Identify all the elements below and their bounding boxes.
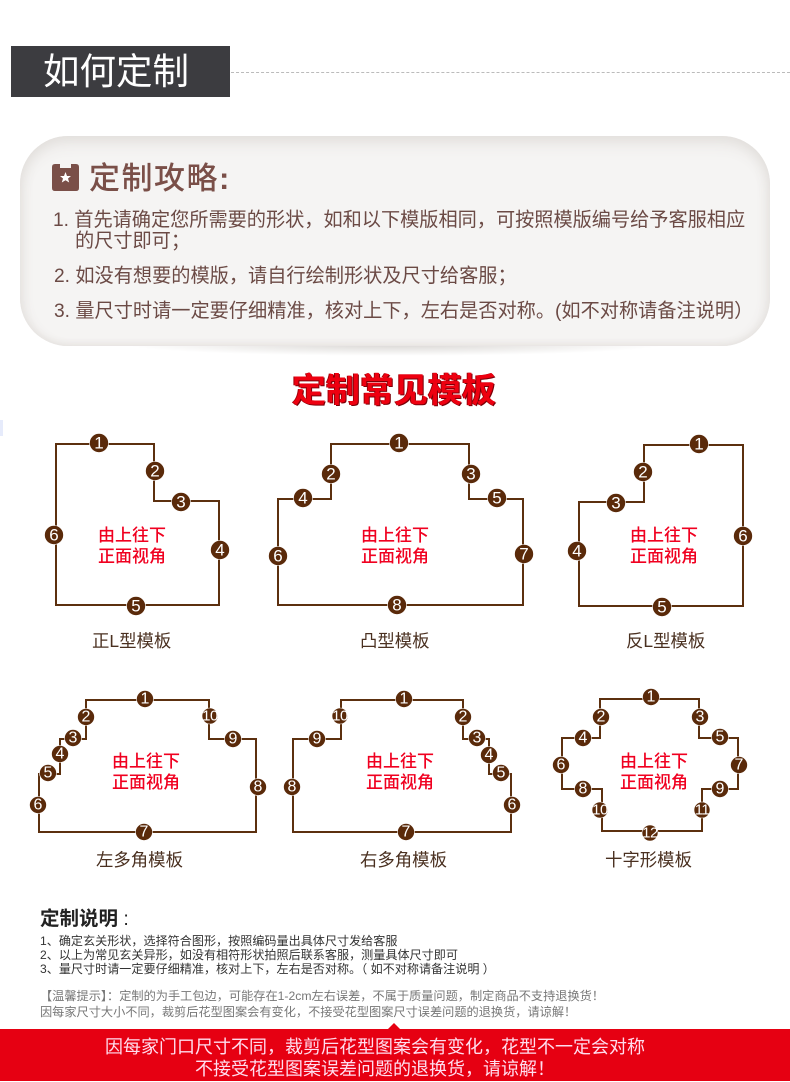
template: convex: 正面视角 [361, 547, 429, 566]
template: reverse L: 6 [738, 526, 748, 546]
template: positive L: 2 [150, 462, 160, 480]
template: right multi-corner: 右多角模板 [360, 850, 447, 870]
template: cross: 3 [696, 708, 705, 726]
icon: star badge [52, 164, 79, 191]
template: left multi-corner: 8 [254, 778, 263, 796]
template: cross: 6 [557, 756, 566, 774]
step 2: 2. 如没有想要的模版，请自行绘制形状及尺寸给客服； [54, 266, 517, 287]
red notice banner [0, 1029, 790, 1081]
step 1: 1. 首先请确定您所需要的形状，如和以下模版相同，可按照模版编号给予客服相应 [53, 210, 745, 231]
template: positive L: 6 [49, 526, 59, 544]
header dashed rule [231, 72, 790, 73]
step 1 [53, 209, 745, 252]
template: right multi-corner: 10 [332, 708, 348, 724]
template: cross [552, 688, 748, 870]
step 3: 3. 量尺寸时请一定要仔细精准，核对上下，左右是否对称。(如不对称请备注说明） [54, 301, 753, 322]
notes list: 2、以上为常见玄关异形，如没有相符形状拍照后联系客服，测量具体尺寸即可 [40, 948, 458, 962]
template: cross: 10 [592, 802, 608, 818]
banner text line 1: 因每家门口尺寸不同，裁剪后花型图案会有变化，花型不一定会对称 [105, 1037, 645, 1057]
template: right multi-corner: 由上往下 [366, 752, 434, 771]
template: right multi-corner: 正面视角 [366, 773, 434, 792]
template: convex: 3 [466, 464, 476, 484]
template: positive L: 3 [176, 492, 186, 512]
template: right multi-corner: 2 [459, 708, 468, 726]
template: cross: 7 [735, 756, 744, 774]
template: positive L: 正L型模板 [92, 631, 171, 651]
template: left multi-corner: 4 [56, 746, 65, 762]
template: left multi-corner: 7 [140, 824, 149, 840]
template: convex [268, 434, 534, 651]
template: left multi-corner: 10 [202, 708, 218, 724]
template: right multi-corner: 5 [497, 764, 506, 782]
template: reverse L: 反L型模板 [626, 631, 705, 651]
template: convex: 8 [392, 596, 402, 614]
template: right multi-corner: 1 [400, 690, 409, 708]
template: positive L: 由上往下 [98, 526, 166, 545]
template: convex: 1 [394, 434, 404, 452]
warm tip: 因每家尺寸大小不同，裁剪后花型图案会有变化，不接受花型图案尺寸误差问题的退换货，请谅解！ [40, 1005, 576, 1019]
template: reverse L: 5 [657, 598, 667, 616]
header title: 如何定制 [43, 51, 189, 92]
template: left multi-corner: 2 [82, 708, 91, 726]
template: left multi-corner: 正面视角 [112, 773, 180, 792]
panel heading: 定制攻略: [89, 161, 231, 196]
template: convex: 6 [273, 546, 283, 566]
step 1: 的尺寸即可； [75, 231, 190, 252]
template: right multi-corner: 4 [485, 746, 494, 764]
template: cross: 9 [716, 780, 725, 798]
template: cross: 十字形模板 [605, 850, 692, 870]
template: left multi-corner: 9 [229, 730, 238, 748]
panel: customization guide [20, 136, 770, 346]
template: convex: 5 [492, 488, 502, 508]
warm tip [40, 989, 604, 1019]
template: positive L: 4 [215, 540, 225, 560]
template: right multi-corner: 7 [402, 824, 411, 840]
template: cross: 12 [642, 824, 658, 842]
template: left multi-corner: 左多角模板 [96, 850, 183, 870]
template: positive L [44, 434, 230, 651]
template: left multi-corner: 5 [44, 764, 53, 782]
template: convex: 7 [519, 544, 529, 564]
template: cross: 11 [695, 802, 709, 818]
template: right multi-corner [284, 690, 520, 870]
template: cross: 由上往下 [620, 752, 688, 771]
template: left multi-corner: 3 [69, 730, 78, 746]
template: reverse L: 3 [611, 494, 621, 512]
panel shadow [120, 344, 670, 356]
notes list [40, 934, 495, 976]
template: positive L: 5 [131, 596, 141, 616]
template: convex: 由上往下 [361, 526, 429, 545]
left edge tint [0, 420, 3, 436]
template: right multi-corner: 6 [508, 796, 517, 814]
notes heading: 定制说明 : [40, 908, 129, 930]
template: cross: 2 [597, 708, 606, 726]
template: cross: 1 [647, 688, 656, 706]
template: reverse L: 4 [572, 542, 582, 560]
template: positive L: 正面视角 [98, 547, 166, 566]
template: convex: 2 [326, 464, 336, 484]
section header [11, 46, 230, 97]
template: right multi-corner: 9 [313, 730, 322, 748]
template: reverse L: 2 [638, 462, 648, 482]
notes list: 3、量尺寸时请一定要仔细精准，核对上下，左右是否对称。（ 如不对称请备注说明 ） [40, 962, 495, 976]
template: convex: 凸型模板 [360, 631, 430, 651]
template: left multi-corner: 1 [141, 690, 150, 708]
template: cross: 8 [579, 780, 588, 798]
notes list: 1、确定玄关形状，选择符合图形，按照编码量出具体尺寸发给客服 [40, 934, 397, 948]
banner pointer [388, 1023, 400, 1029]
template: positive L: 1 [94, 434, 104, 452]
template: convex: 4 [298, 488, 308, 508]
template: right multi-corner: 8 [288, 778, 297, 796]
banner text line 2: 不接受花型图案误差问题的退换货，请谅解！ [195, 1059, 555, 1079]
template: right multi-corner: 3 [473, 730, 482, 746]
template: reverse L: 正面视角 [630, 547, 698, 566]
template: left multi-corner [30, 690, 266, 870]
templates title: 定制常见模板 [292, 372, 496, 410]
template: left multi-corner: 由上往下 [112, 752, 180, 771]
template: reverse L: 1 [694, 434, 704, 454]
template: cross: 5 [716, 728, 725, 746]
template: reverse L: 由上往下 [630, 526, 698, 545]
template: left multi-corner: 6 [34, 796, 43, 814]
template: reverse L [568, 434, 752, 651]
warm tip: 【温馨提示】：定制的为手工包边，可能存在1-2cm左右误差，不属于质量问题，制定商品不支持退换货！ [40, 989, 604, 1003]
template: cross: 正面视角 [620, 773, 688, 792]
template: cross: 4 [579, 730, 588, 746]
